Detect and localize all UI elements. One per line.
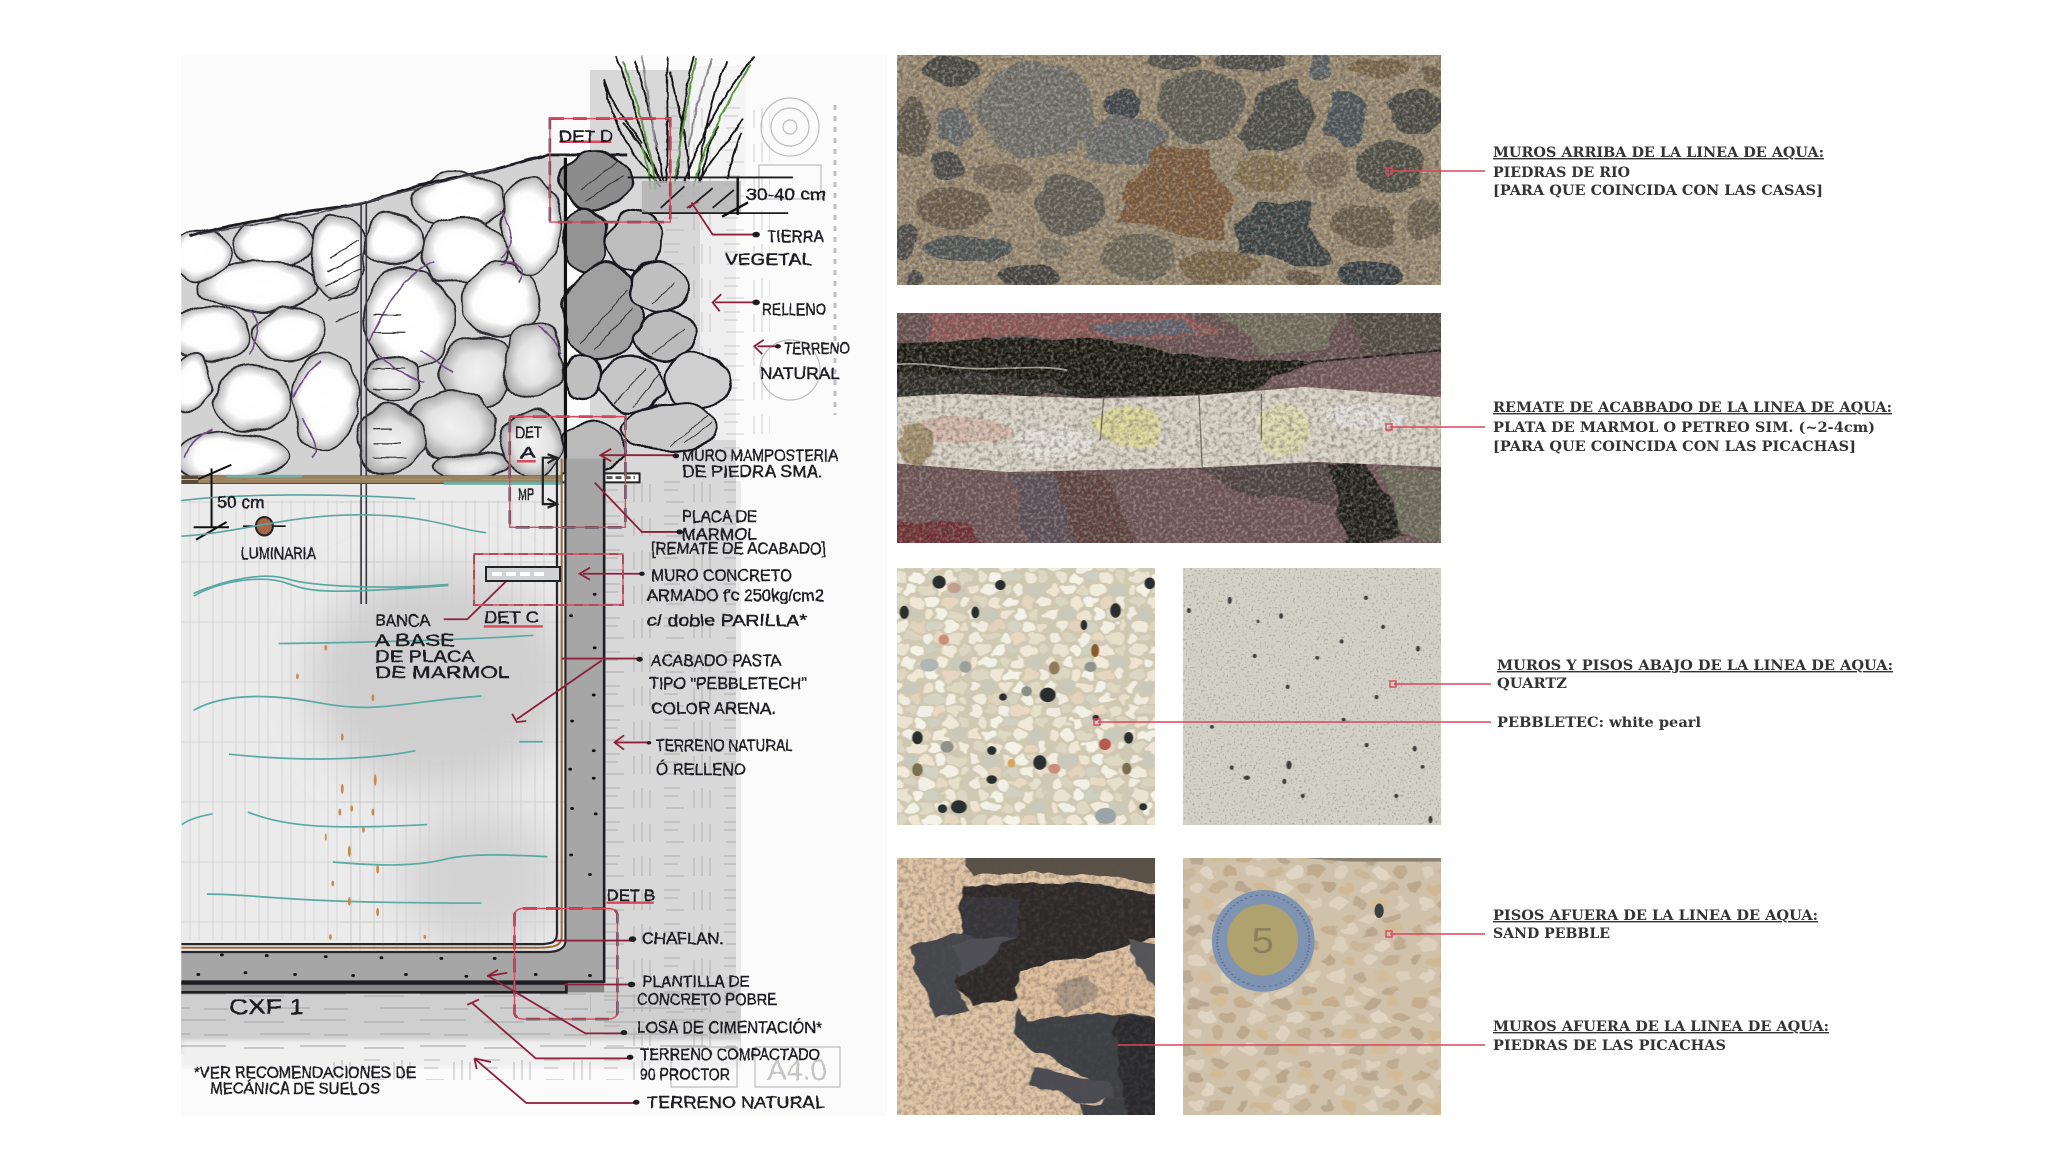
callout: muros y pisos abajo: MUROS Y PISOS ABAJO DE LA LINEA DE AQUA: xyxy=(1497,658,1893,674)
leader lines lower xyxy=(444,580,649,1103)
handwritten annotations: A xyxy=(520,443,537,462)
callout: pisos afuera xyxy=(1386,908,1818,942)
handwritten annotations: COLOR ARENA. xyxy=(651,699,776,718)
callout: muros arriba: MUROS ARRIBA DE LA LINEA DE AQUA: xyxy=(1493,145,1824,161)
handwritten annotations: DE PLACA xyxy=(375,647,476,666)
callout: muros y pisos abajo: QUARTZ xyxy=(1497,676,1567,692)
section stones xyxy=(561,153,727,469)
handwritten annotations: DET D xyxy=(559,127,613,146)
handwritten annotations: BANCA xyxy=(375,611,431,630)
handwritten annotations: PLANTILLA DE xyxy=(642,972,750,991)
handwritten annotations: LUMINARIA xyxy=(241,544,317,563)
concrete aggregate dots xyxy=(196,593,598,978)
photo: quartz xyxy=(1183,568,1441,825)
marble cap xyxy=(562,473,640,482)
handwritten annotations: TERRENO NATURAL xyxy=(647,1093,825,1112)
callout: muros afuera: PIEDRAS DE LAS PICACHAS xyxy=(1493,1038,1726,1054)
handwritten annotations: A BASE xyxy=(375,631,455,650)
handwritten annotations: c/ doble PARILLA* xyxy=(647,611,807,630)
photo: pebbletec white pearl xyxy=(897,568,1155,825)
dimension 50 cm xyxy=(194,465,231,540)
handwritten annotations: LOSA DE CIMENTACIÓN* xyxy=(637,1018,822,1037)
water lines upper xyxy=(181,495,486,593)
leader end dots lower xyxy=(621,657,651,1105)
handwritten annotations: PLACA DE xyxy=(682,507,757,526)
luminaire xyxy=(243,517,286,536)
dimension 30-40 cm xyxy=(722,177,748,217)
handwritten annotations: MP xyxy=(518,485,534,504)
handwritten annotations: *VER RECOMENDACIONES DE xyxy=(194,1063,416,1082)
detail boxes upper xyxy=(510,119,781,580)
handwritten annotations: ARMADO f'c 250kg/cm2 xyxy=(647,586,824,605)
handwritten annotations: CHAFLAN. xyxy=(642,929,724,948)
callout: muros afuera: MUROS AFUERA DE LA LINEA DE AQUA: xyxy=(1493,1019,1829,1035)
handwritten annotations: MURO MAMPOSTERIA xyxy=(682,446,839,465)
photo: river stone wall xyxy=(897,55,1441,285)
wall vertical joint xyxy=(361,204,366,604)
handwritten annotations: RELLENO xyxy=(762,300,826,319)
handwritten annotations: 30-40 cm xyxy=(746,185,826,204)
callout: remate de acabado: PLATA DE MARMOL O PETREO SIM. (~2-4cm) xyxy=(1493,420,1875,436)
water line band xyxy=(181,477,562,482)
handwritten annotations: VEGETAL xyxy=(725,250,812,269)
handwritten annotations: CONCRETO POBRE xyxy=(637,990,777,1009)
callout: remate de acabado: REMATE DE ACABBADO DE LA LINEA DE AQUA: xyxy=(1493,400,1892,416)
wall top profile xyxy=(189,155,628,236)
callout: muros arriba xyxy=(1386,145,1824,199)
wall stones, white with outlines xyxy=(170,173,564,480)
handwritten annotations: DET xyxy=(515,423,542,442)
photo: sand pebble with coin xyxy=(1183,858,1441,1115)
handwritten annotations: TIPO "PEBBLETECH" xyxy=(649,674,807,693)
wall hatch column xyxy=(326,240,411,458)
wall section vertical line xyxy=(564,158,567,479)
handwritten annotations: CXF 1 xyxy=(229,996,304,1019)
handwritten annotations: DET C xyxy=(484,608,539,627)
handwritten annotations: TERRENO xyxy=(784,339,850,358)
orange pigment specks xyxy=(296,645,426,940)
coin: 5 xyxy=(1251,921,1274,961)
callout: remate de acabado: [PARA QUE COINCIDA CON LAS PICACHAS] xyxy=(1493,439,1856,455)
handwritten annotations: A4.0 xyxy=(767,1054,827,1087)
handwritten annotations: DE PIEDRA SMA. xyxy=(682,462,823,481)
panel: section sketch xyxy=(170,55,887,1116)
coin xyxy=(1212,890,1315,992)
handwritten annotations: DE MARMOL xyxy=(375,663,510,682)
callout: muros arriba: PIEDRAS DE RIO xyxy=(1493,165,1630,181)
handwritten annotations: DET B xyxy=(607,886,655,905)
callout: remate de acabado xyxy=(1386,400,1892,455)
bench marble plate xyxy=(486,567,560,581)
sketch paper background xyxy=(181,66,770,1080)
concrete wall and slab xyxy=(181,459,654,1105)
callout: muros y pisos abajo xyxy=(1094,658,1893,731)
leader end dots upper xyxy=(639,232,781,576)
stone wall elevation xyxy=(170,56,793,604)
handwritten annotations: MECÁNICA DE SUELOS xyxy=(210,1079,380,1098)
pool water lines xyxy=(182,579,548,903)
callout: muros y pisos abajo: PEBBLETEC: white pearl xyxy=(1497,715,1701,731)
handwritten annotations: TIERRA xyxy=(767,227,825,246)
callout: pisos afuera: PISOS AFUERA DE LA LINEA DE AQUA: xyxy=(1493,908,1818,924)
detail B box xyxy=(514,908,617,1019)
red detail underlines xyxy=(484,626,654,903)
plant xyxy=(604,56,755,190)
photo: marble band in rock xyxy=(897,313,1441,543)
handwritten annotations: [REMATE DE ACABADO] xyxy=(651,539,826,558)
callout: pisos afuera: SAND PEBBLE xyxy=(1493,926,1610,942)
section arrow xyxy=(543,454,557,508)
photo: dark picacha rocks on sand xyxy=(897,858,1155,1115)
handwritten annotations: 90 PROCTOR xyxy=(640,1065,730,1084)
callout: muros arriba: [PARA QUE COINCIDA CON LAS CASAS] xyxy=(1493,183,1823,199)
handwritten annotations xyxy=(194,127,850,1112)
soil layer xyxy=(642,181,741,213)
handwritten annotations: MURO CONCRETO xyxy=(651,566,792,585)
wall stone purple mortar strokes xyxy=(184,211,562,458)
handwritten annotations: TERRENO COMPACTADO xyxy=(640,1045,820,1064)
section hatching xyxy=(581,161,713,447)
detail C box xyxy=(474,554,623,605)
leader lines upper xyxy=(580,201,781,580)
handwritten annotations: 50 cm xyxy=(217,493,265,512)
ghost stamp marks xyxy=(671,98,840,1087)
handwritten annotations: ACABADO PASTA xyxy=(651,651,782,670)
handwritten annotations: MARMOL xyxy=(682,525,757,544)
handwritten annotations: TERRENO NATURAL xyxy=(656,736,793,755)
handwritten annotations: NATURAL xyxy=(760,364,840,383)
handwritten annotations: Ó RELLENO xyxy=(656,760,746,779)
callout: muros afuera xyxy=(1118,1019,1829,1054)
